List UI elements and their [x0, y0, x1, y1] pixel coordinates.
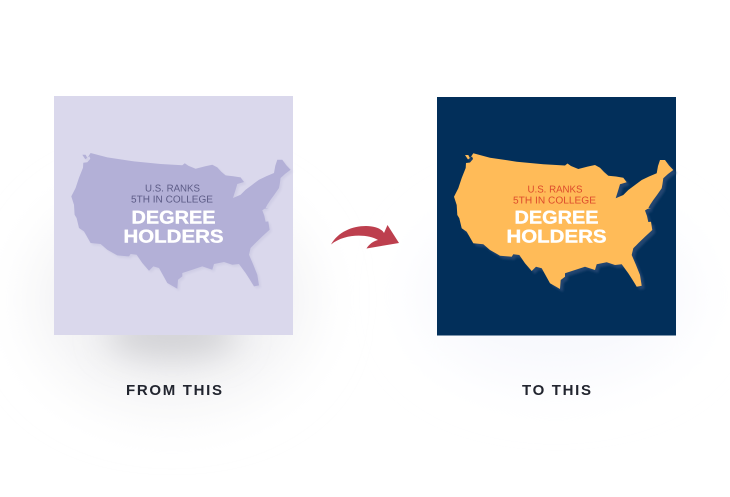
text: faded ranking: U.S. RANKS [145, 184, 200, 195]
text: faded ranking: DEGREE [132, 206, 216, 227]
text: highlighted ranking: U.S. RANKS [528, 184, 583, 195]
panel: to this [437, 97, 676, 336]
arrow [331, 225, 399, 248]
text: faded ranking [124, 184, 224, 246]
text: highlighted ranking: DEGREE [514, 207, 598, 228]
map: faded United States [71, 153, 293, 291]
text: highlighted ranking [506, 184, 606, 247]
label: to this: TO THIS [522, 382, 591, 399]
shadow: right panel [421, 210, 691, 380]
panel: from this [54, 96, 293, 335]
text: highlighted ranking: 5TH IN COLLEGE [513, 195, 596, 206]
label: from this: FROM THIS [126, 382, 222, 399]
text: faded ranking: 5TH IN COLLEGE [131, 195, 213, 206]
text: faded ranking: HOLDERS [124, 225, 224, 246]
text: highlighted ranking: HOLDERS [506, 226, 606, 247]
shadow: left panel [37, 195, 307, 405]
map: highlighted United States [454, 153, 676, 292]
